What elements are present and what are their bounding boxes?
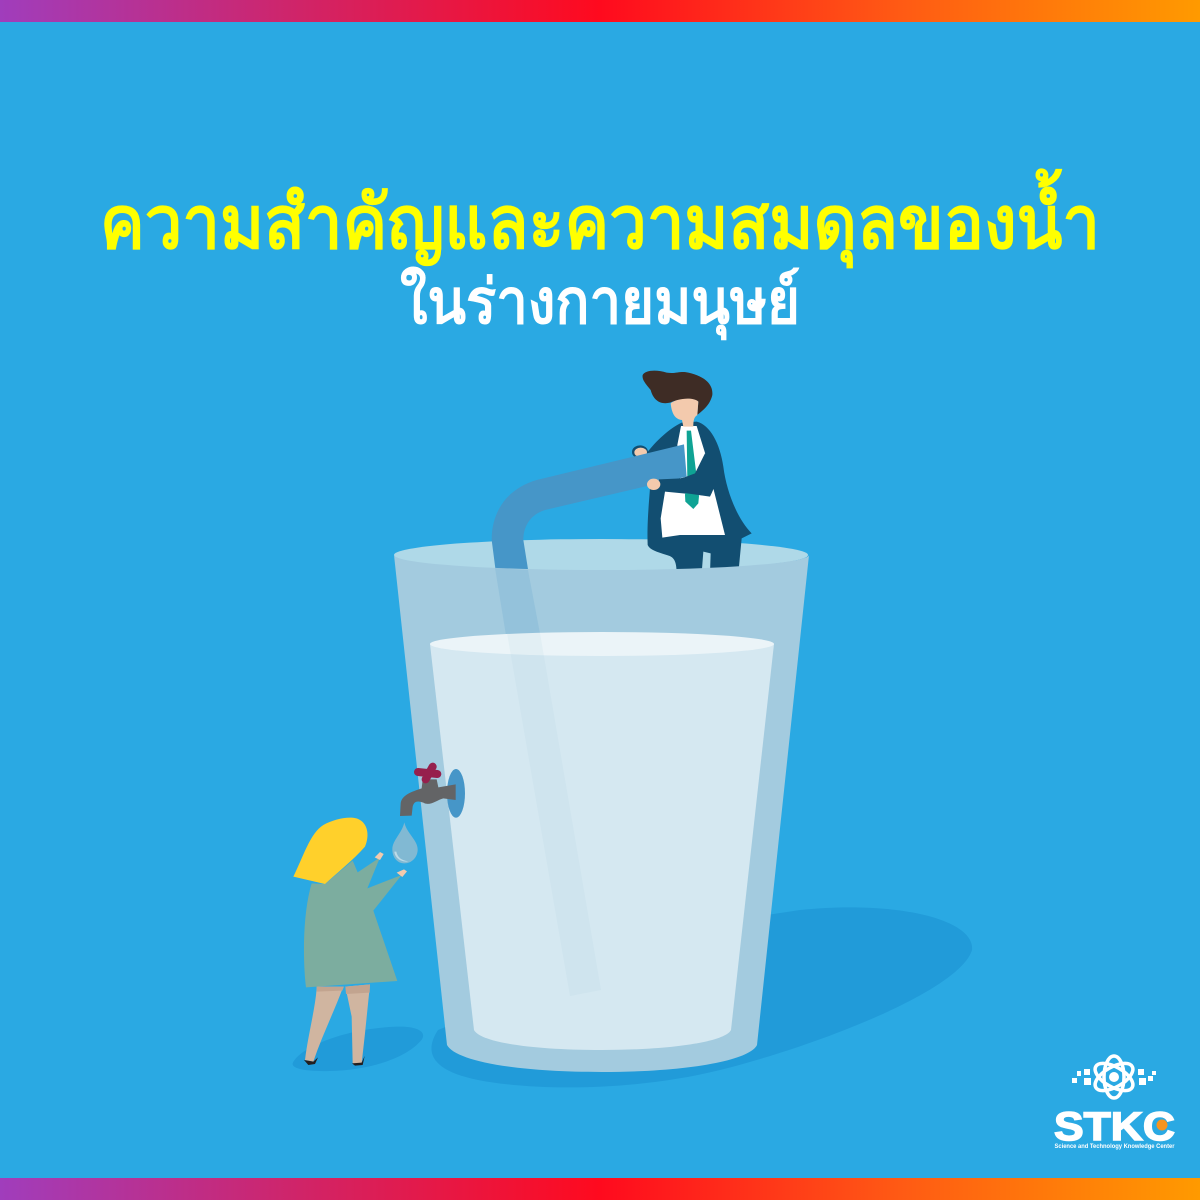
water xyxy=(430,644,774,1050)
pipe outside glass xyxy=(492,444,687,573)
logo orange dot xyxy=(1156,1120,1168,1130)
logo atom icon xyxy=(1091,1056,1137,1098)
glass body xyxy=(394,555,809,1072)
bottom gradient bar xyxy=(0,1178,1200,1200)
woman and faucet xyxy=(293,767,465,1071)
top gradient bar xyxy=(0,0,1200,22)
man hair xyxy=(643,371,712,415)
logo tagline: Science and Technology Knowledge Center xyxy=(1054,1144,1175,1150)
faucet handle xyxy=(418,767,437,779)
woman shadow xyxy=(293,1027,423,1071)
man face xyxy=(671,399,698,427)
glass rim back xyxy=(394,539,808,571)
title line 1: ความสำคัญและความสมดุลของน้ำ xyxy=(100,168,1100,269)
faucet flange xyxy=(447,769,465,818)
logo wordmark: STKC xyxy=(1054,1105,1175,1149)
woman shoes xyxy=(304,1056,365,1066)
STKC logo xyxy=(1054,1056,1175,1150)
pipe inside glass xyxy=(495,568,545,660)
title xyxy=(100,168,1100,340)
water surface xyxy=(430,632,774,656)
woman legs xyxy=(305,984,370,1063)
woman hair xyxy=(293,818,368,884)
man upper fingers xyxy=(634,448,647,457)
pipe inside water xyxy=(507,633,601,996)
water drop xyxy=(392,822,418,863)
man arm xyxy=(659,453,721,497)
glass shadow on ground xyxy=(431,907,972,1087)
woman hands xyxy=(375,852,407,877)
man suit xyxy=(647,422,752,573)
man upper hand xyxy=(632,445,648,459)
logo pixels xyxy=(1072,1069,1156,1085)
woman dress xyxy=(304,857,402,987)
man tie xyxy=(685,431,699,509)
woman skirt shadow on legs xyxy=(317,984,370,994)
faucet spout xyxy=(400,779,456,816)
drop highlight xyxy=(394,852,408,862)
man lower hand xyxy=(647,479,660,490)
man shirt xyxy=(661,426,725,538)
title line 2: ในร่างกายมนุษย์ xyxy=(400,266,800,340)
man figure xyxy=(492,371,752,573)
